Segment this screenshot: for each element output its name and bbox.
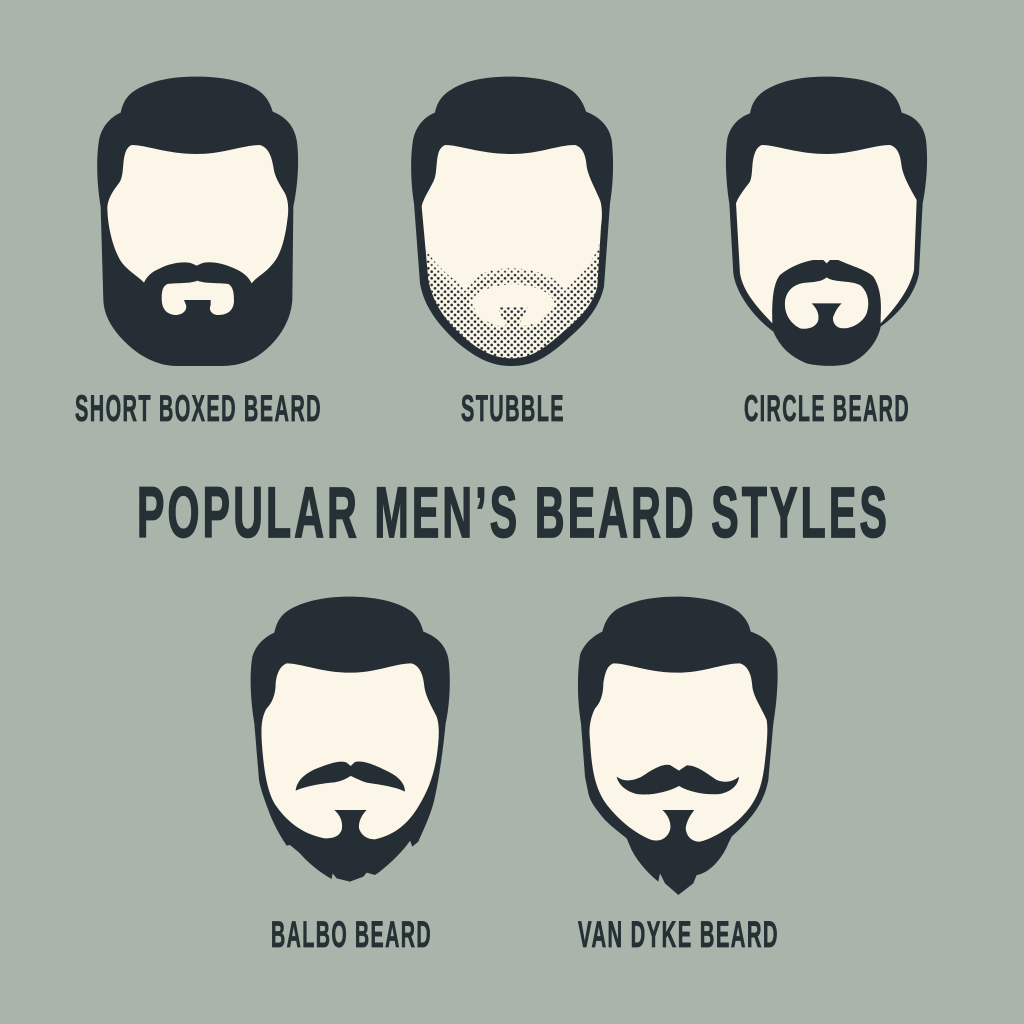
face skin bbox=[261, 663, 439, 839]
halftone stubble: dense centre bbox=[426, 256, 599, 358]
label: balbo beard: BALBO BEARD bbox=[271, 914, 432, 955]
label: short boxed beard: SHORT BOXED BEARD bbox=[75, 388, 322, 429]
face skin bbox=[736, 145, 917, 323]
moustache bbox=[296, 762, 405, 792]
icon: short boxed beard face bbox=[97, 77, 298, 366]
icon: balbo beard face bbox=[251, 597, 450, 882]
hair and full beard silhouette bbox=[97, 77, 298, 366]
chin patch bbox=[785, 277, 868, 329]
label: van dyke beard: VAN DYKE BEARD bbox=[578, 914, 779, 955]
hair and balbo beard silhouette bbox=[251, 597, 450, 882]
halftone stubble: light edge bbox=[426, 244, 600, 358]
hair, outline and van dyke beard silhouette bbox=[578, 597, 778, 895]
icon: circle beard face bbox=[726, 77, 927, 366]
hair and thin outline silhouette bbox=[411, 77, 613, 366]
moustache bbox=[617, 765, 739, 794]
label: stubble: STUBBLE bbox=[461, 388, 565, 429]
icon: van dyke beard face bbox=[578, 597, 778, 895]
icon: stubble face bbox=[411, 77, 613, 366]
face skin bbox=[422, 145, 602, 358]
face skin bbox=[107, 145, 288, 283]
hair, outline and circle beard silhouette bbox=[726, 77, 927, 366]
chin patch bbox=[162, 281, 234, 315]
face skin bbox=[589, 663, 767, 842]
